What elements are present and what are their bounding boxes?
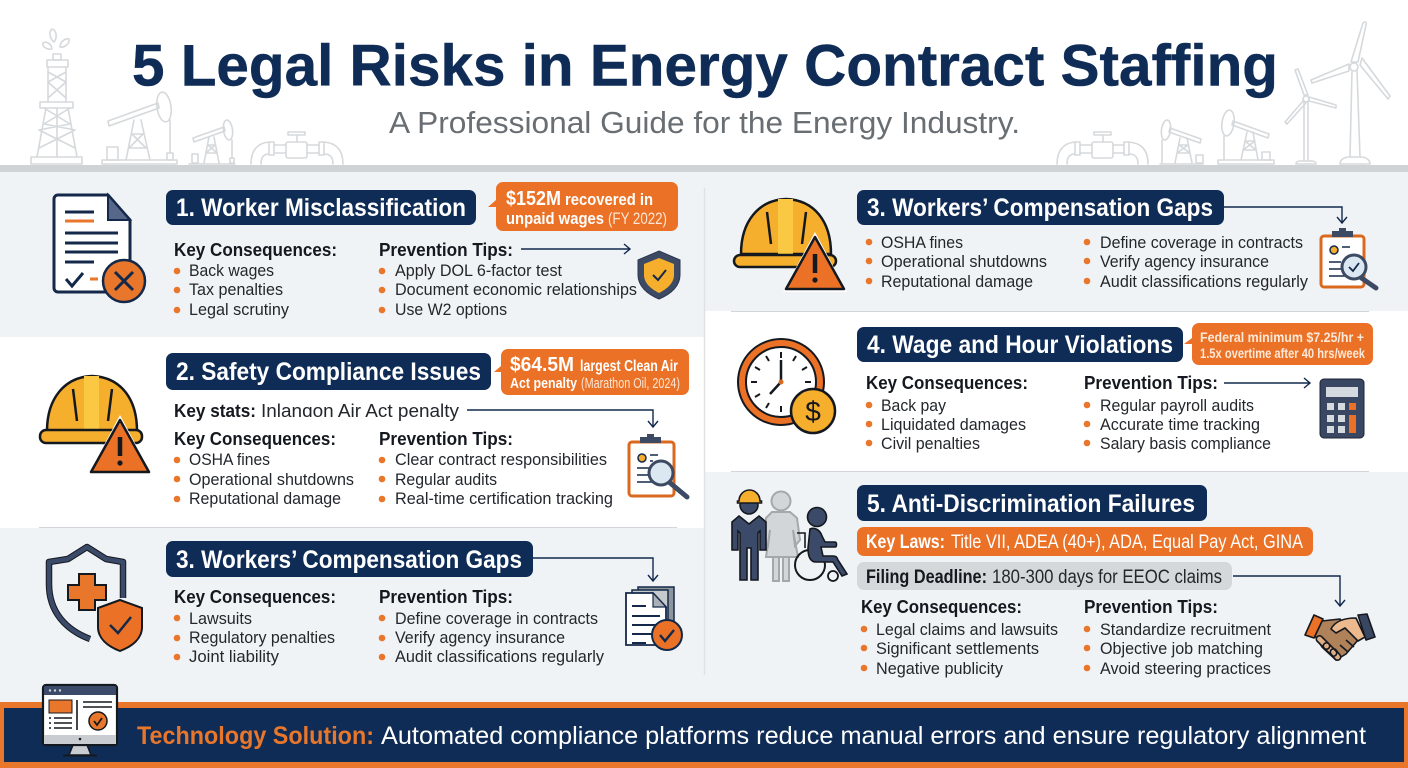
filing deadline banner: Filing Deadline: <box>866 567 987 588</box>
icon: handshake <box>1305 614 1375 660</box>
prevention tips: Avoid steering practices <box>1100 659 1271 678</box>
key consequences: Key Consequences: <box>866 372 1028 393</box>
icon: monitor with compliance dashboard <box>43 685 117 756</box>
wheelchair user figure <box>795 508 847 581</box>
arrow <box>533 558 658 581</box>
prevention tips: Salary basis compliance <box>1100 434 1271 453</box>
key consequences <box>861 596 1058 678</box>
callout: $152M: (FY 2022) <box>608 209 667 228</box>
prevention tips: Real-time certification tracking <box>395 489 613 508</box>
arrow <box>1224 378 1310 388</box>
prevention tips: Verify agency insurance <box>395 628 565 647</box>
icon: shield with cross <box>49 547 142 651</box>
prevention tips <box>379 239 637 319</box>
key consequences <box>174 428 354 508</box>
icon: hard hat with warning <box>40 376 152 475</box>
filing deadline banner: 180-300 days for EEOC claims <box>992 567 1222 588</box>
icon: clock with dollar coin <box>738 339 835 433</box>
prevention tips: Apply DOL 6-factor test <box>395 261 562 280</box>
key stats: Inlanɑon Air Act penalty <box>261 400 460 421</box>
consequences list: Reputational damage <box>881 272 1033 291</box>
prevention list: Audit classifications regularly <box>1100 272 1308 291</box>
prevention tips: Define coverage in contracts <box>395 609 598 628</box>
panel: 5. anti-discrimination failures <box>704 472 1408 703</box>
prevention tips: Use W2 options <box>395 300 507 319</box>
key consequences: Liquidated damages <box>881 415 1026 434</box>
filing deadline banner <box>857 562 1232 590</box>
prevention tips: Document economic relationships <box>395 280 637 299</box>
panel: 3. workers' compensation gaps (right) <box>704 172 1408 312</box>
skyline: right pipeline, pumpjacks and wind turbines line art <box>1057 22 1390 164</box>
prevention tips: Prevention Tips: <box>1084 372 1218 393</box>
key consequences: Joint liability <box>189 647 279 666</box>
callout: federal minimum <box>1184 323 1373 365</box>
callout: $152M: recovered in <box>565 190 653 209</box>
heading: 3. Workers’ Compensation Gaps <box>176 546 522 574</box>
skyline: left oil and gas line art <box>31 29 343 164</box>
key consequences: Negative publicity <box>876 659 1003 678</box>
heading: 3. Workers’ Compensation Gaps <box>867 194 1213 222</box>
prevention tips: Regular payroll audits <box>1100 396 1254 415</box>
prevention tips: Prevention Tips: <box>379 586 513 607</box>
callout: $152M <box>488 182 678 231</box>
callout: federal minimum: 1.5x overtime after 40 hrs/week <box>1200 345 1365 361</box>
arrow <box>521 244 630 254</box>
panel: 4. wage and hour violations <box>704 312 1408 472</box>
callout: $64.5M: Act penalty <box>510 375 578 392</box>
prevention list <box>1084 233 1308 291</box>
key consequences <box>174 239 337 319</box>
key consequences: Key Consequences: <box>174 586 336 607</box>
consequences list <box>866 233 1047 291</box>
heading <box>166 353 491 390</box>
consequences list: Operational shutdowns <box>881 252 1047 271</box>
key consequences: Regulatory penalties <box>189 628 335 647</box>
arrow <box>1233 576 1345 606</box>
footer text: Automated compliance platforms reduce manual errors and ensure regulatory alignment <box>381 722 1366 750</box>
key consequences: Legal scrutiny <box>189 300 289 319</box>
icon: shield <box>638 251 680 299</box>
icon: hard hat with warning <box>734 199 847 292</box>
key consequences: Tax penalties <box>189 280 283 299</box>
prevention tips <box>379 586 604 666</box>
key consequences: Reputational damage <box>189 489 341 508</box>
prevention tips <box>1084 596 1271 678</box>
key consequences: Lawsuits <box>189 609 252 628</box>
prevention list: Verify agency insurance <box>1100 252 1269 271</box>
prevention tips: Clear contract responsibilities <box>395 450 607 469</box>
key consequences: Back pay <box>881 396 946 415</box>
panel: 2. safety compliance issues <box>0 337 704 528</box>
title: 5 Legal Risks in Energy Contract Staffing <box>132 34 1278 98</box>
key stats <box>174 400 460 421</box>
key laws banner <box>857 527 1313 556</box>
prevention tips: Prevention Tips: <box>1084 596 1218 617</box>
key consequences: Legal claims and lawsuits <box>876 620 1058 639</box>
prevention tips: Prevention Tips: <box>379 428 513 449</box>
callout: $64.5M: (Marathon Oil, 2024) <box>581 376 680 392</box>
panel: 1. worker misclassification <box>0 172 704 337</box>
icon: clipboard with magnifier <box>629 435 687 497</box>
callout: federal minimum: Federal minimum $7.25/hr + <box>1200 329 1364 345</box>
heading: 1. Worker Misclassification <box>176 194 466 222</box>
prevention list: Define coverage in contracts <box>1100 233 1303 252</box>
prevention tips: Objective job matching <box>1100 639 1263 658</box>
icon: diverse workers <box>732 490 847 581</box>
callout: $152M: $152M <box>506 188 561 210</box>
key consequences: Significant settlements <box>876 639 1039 658</box>
key stats: Key stats: <box>174 400 256 421</box>
subtitle: A Professional Guide for the Energy Industry. <box>389 105 1020 140</box>
key consequences: Back wages <box>189 261 274 280</box>
icon: clipboard with magnifier <box>1321 229 1376 288</box>
arrow <box>1224 207 1347 223</box>
prevention tips: Regular audits <box>395 470 497 489</box>
callout: $64.5M <box>494 349 689 395</box>
key consequences: Operational shutdowns <box>189 470 354 489</box>
prevention tips <box>379 428 613 508</box>
heading: 5. Anti-Discrimination Failures <box>867 490 1195 518</box>
footer text: Technology Solution: <box>137 722 374 750</box>
prevention tips: Standardize recruitment <box>1100 620 1271 639</box>
key consequences <box>866 372 1028 453</box>
key consequences: OSHA fines <box>189 450 270 469</box>
panel: 3. workers' compensation gaps (left) <box>0 528 704 703</box>
icon: calculator <box>1320 379 1364 438</box>
woman figure <box>764 492 800 581</box>
prevention tips: Prevention Tips: <box>379 239 513 260</box>
worker figure <box>732 490 766 580</box>
icon: documents with check <box>626 587 682 650</box>
key consequences: Key Consequences: <box>861 596 1022 617</box>
prevention tips: Audit classifications regularly <box>395 647 604 666</box>
key consequences: Key Consequences: <box>174 239 337 260</box>
key consequences <box>174 586 336 666</box>
header <box>31 22 1390 164</box>
icon: document with x <box>54 195 145 302</box>
icon: clock with dollar coin: $ <box>805 396 821 427</box>
footer banner <box>0 685 1408 768</box>
prevention tips <box>1084 372 1271 453</box>
callout: $64.5M: $64.5M <box>510 354 574 376</box>
heading: 4. Wage and Hour Violations <box>867 331 1173 359</box>
arrow <box>467 410 658 427</box>
key laws banner: Key Laws: <box>866 532 945 553</box>
key consequences: Civil penalties <box>881 434 980 453</box>
key laws banner: Title VII, ADEA (40+), ADA, Equal Pay Act, GINA <box>951 532 1303 553</box>
heading: 2. Safety Compliance Issues <box>176 358 481 386</box>
consequences list: OSHA fines <box>881 233 963 252</box>
prevention tips: Accurate time tracking <box>1100 415 1260 434</box>
callout: $152M: unpaid wages <box>506 209 604 228</box>
key consequences: Key Consequences: <box>174 428 336 449</box>
callout: $64.5M: largest Clean Air <box>580 358 678 375</box>
